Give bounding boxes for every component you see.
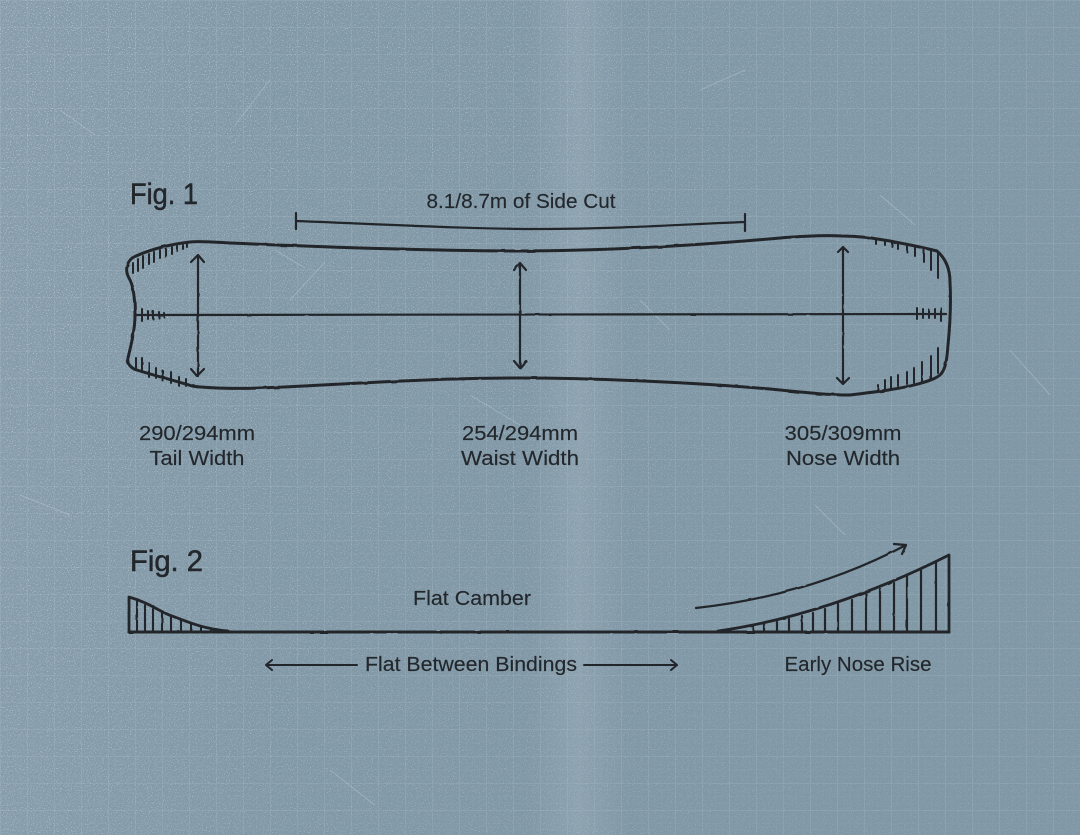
waist width arrow [514, 263, 526, 368]
figure 1: board outline top view [127, 236, 950, 395]
nose width label: 305/309mm [784, 422, 902, 445]
tail width label: 290/294mm [139, 422, 255, 445]
nose hatching [753, 562, 936, 632]
nose width label [784, 422, 902, 470]
figure 2: board profile side view [129, 544, 949, 633]
tail width label: Tail Width [150, 447, 244, 470]
tail hatching [137, 601, 211, 632]
tail width arrow [191, 255, 204, 376]
flat between bindings dimension [266, 653, 677, 676]
nose hatching [876, 239, 941, 391]
flat camber label: Flat Camber [413, 587, 531, 610]
waist width label: Waist Width [461, 447, 579, 470]
tail rise [129, 597, 228, 632]
early nose rise label: Early Nose Rise [784, 653, 932, 676]
profile baseline [129, 630, 949, 634]
heading: Fig. 1: Fig. 1 [130, 178, 198, 211]
nose rise [718, 555, 949, 632]
nose width label: Nose Width [786, 447, 900, 470]
centre line [135, 314, 946, 315]
nose width arrow [837, 247, 849, 384]
rise direction arrow [696, 544, 906, 608]
tail hatching [133, 243, 187, 386]
board outline [127, 236, 950, 395]
tail width label [139, 422, 255, 470]
waist width label: 254/294mm [462, 422, 578, 445]
heading: Fig. 2: Fig. 2 [130, 545, 203, 578]
side cut bracket and label: 8.1/8.7m of Side Cut [426, 190, 616, 213]
flat between bindings dimension: Flat Between Bindings [365, 653, 577, 676]
waist width label [461, 422, 579, 470]
side cut bracket and label [296, 190, 745, 231]
